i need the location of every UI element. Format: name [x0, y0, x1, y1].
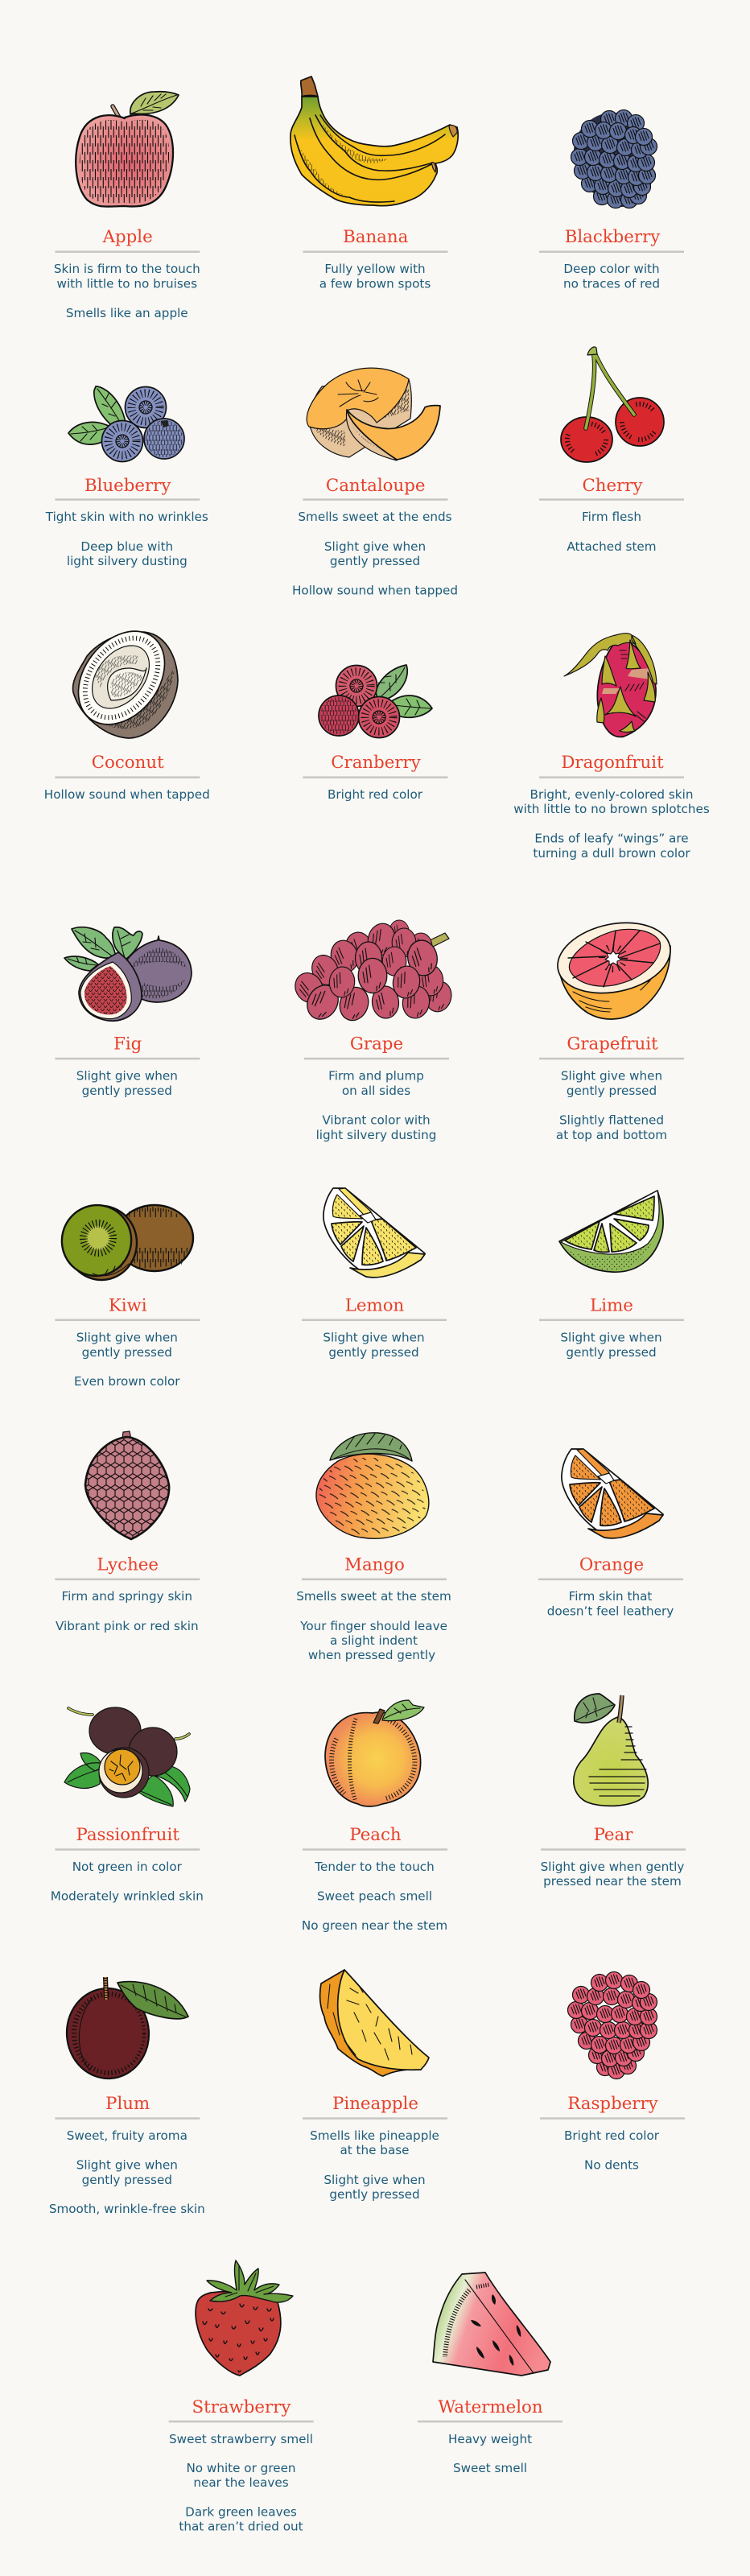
icon: cranberry: [319, 665, 432, 737]
text: dragonfruit tips: [513, 787, 710, 861]
panel: fig: [55, 927, 200, 1098]
icon: passionfruit: [64, 1707, 190, 1806]
heading: fig: Fig: [113, 1034, 142, 1055]
icon: pear: [574, 1694, 648, 1806]
text: pineapple tips: Slight give when: [323, 2173, 426, 2187]
text: lime tips: Slight give when: [560, 1331, 662, 1345]
panel: cherry: [539, 347, 684, 554]
panel: grapefruit: [539, 913, 684, 1142]
icon: coconut: [60, 614, 183, 741]
text: raspberry tips: No dents: [584, 2158, 639, 2173]
icon: kiwi: [53, 1196, 193, 1285]
text: watermelon tips: [448, 2432, 532, 2475]
heading: grape: Grape: [350, 1034, 403, 1055]
icon: raspberry: [568, 1972, 657, 2079]
panel: lemon: [302, 1188, 447, 1360]
text: apple tips: [54, 262, 200, 320]
heading: coconut: Coconut: [92, 753, 164, 773]
text: kiwi tips: [74, 1331, 180, 1389]
text: banana tips: Fully yellow with: [324, 262, 426, 276]
heading: banana: Banana: [343, 227, 409, 247]
panel: orange: [538, 1449, 683, 1618]
heading: cantaloupe: Cantaloupe: [326, 476, 425, 496]
panel: dragonfruit: [513, 634, 710, 861]
heading: blackberry: Blackberry: [565, 227, 660, 247]
text: banana tips: a few brown spots: [319, 277, 431, 291]
text: peach tips: Sweet peach smell: [317, 1889, 432, 1903]
text: cantaloupe tips: Slight give when: [324, 539, 426, 554]
panel: passionfruit: [51, 1707, 204, 1903]
icon: dragonfruit: [564, 634, 657, 737]
text: grape tips: Firm and plump: [328, 1069, 424, 1084]
icon: watermelon: [433, 2273, 550, 2376]
text: peach tips: Tender to the touch: [314, 1860, 435, 1874]
text: plum tips: Slight give when: [76, 2158, 178, 2173]
text: lychee tips: Vibrant pink or red skin: [56, 1619, 199, 1633]
text: lemon tips: [323, 1331, 425, 1360]
panel: peach: [302, 1700, 447, 1933]
text: plum tips: [49, 2128, 205, 2216]
text: dragonfruit tips: with little to no brown splotches: [513, 802, 710, 816]
text: grape tips: light silvery dusting: [316, 1128, 436, 1142]
panel: pineapple: [303, 1970, 447, 2202]
text: orange tips: doesn’t feel leathery: [547, 1604, 674, 1618]
text: pear tips: Slight give when gently: [541, 1860, 684, 1874]
panel: blackberry: [539, 109, 684, 291]
heading: orange: Orange: [579, 1555, 644, 1575]
text: cherry tips: Firm flesh: [582, 510, 641, 524]
text: plum tips: Smooth, wrinkle-free skin: [49, 2202, 205, 2216]
heading: pear: Pear: [594, 1825, 633, 1845]
text: grapefruit tips: Slightly flattened: [559, 1113, 664, 1127]
panel: raspberry: [540, 1972, 685, 2173]
text: grapefruit tips: gently pressed: [567, 1084, 657, 1098]
icon: plum: [64, 1977, 188, 2081]
text: apple tips: Skin is firm to the touch: [54, 262, 200, 276]
text: fig tips: [76, 1069, 178, 1098]
text: kiwi tips: Even brown color: [74, 1374, 180, 1389]
panel: banana: [291, 76, 458, 291]
panel: lychee: [55, 1431, 200, 1633]
text: lychee tips: Firm and springy skin: [62, 1589, 192, 1604]
heading: pineapple: Pineapple: [332, 2094, 418, 2114]
icon: cherry: [561, 347, 664, 462]
text: cherry tips: [567, 510, 657, 554]
text: dragonfruit tips: turning a dull brown color: [533, 846, 690, 861]
panel: watermelon: [418, 2273, 562, 2475]
text: strawberry tips: [169, 2432, 313, 2534]
text: watermelon tips: Sweet smell: [453, 2461, 527, 2475]
heading: raspberry: Raspberry: [567, 2094, 658, 2114]
panel: cranberry: [303, 665, 447, 802]
text: dragonfruit tips: Ends of leafy “wings” are: [534, 831, 689, 845]
heading: lime: Lime: [590, 1296, 633, 1315]
text: orange tips: [547, 1589, 674, 1618]
panel: kiwi: [53, 1196, 200, 1389]
text: grape tips: Vibrant color with: [322, 1113, 431, 1127]
text: mango tips: Smells sweet at the stem: [296, 1589, 451, 1604]
icon: peach: [325, 1700, 424, 1806]
icon: fig: [64, 927, 192, 1021]
text: strawberry tips: near the leaves: [193, 2475, 289, 2490]
text: passionfruit tips: Not green in color: [72, 1860, 183, 1874]
text: cranberry tips: Bright red color: [328, 787, 423, 802]
heading: grapefruit: Grapefruit: [567, 1034, 658, 1055]
text: coconut tips: Hollow sound when tapped: [44, 787, 210, 802]
text: peach tips: No green near the stem: [302, 1918, 447, 1933]
heading: plum: Plum: [105, 2094, 150, 2114]
icon: blueberry: [68, 386, 184, 462]
text: passionfruit tips: Moderately wrinkled skin: [51, 1889, 204, 1903]
heading: mango: Mango: [344, 1555, 405, 1575]
text: blackberry tips: no traces of red: [563, 277, 660, 291]
text: cantaloupe tips: Hollow sound when tapped: [292, 583, 458, 597]
heading: apple: Apple: [102, 227, 153, 247]
text: pineapple tips: Smells like pineapple: [310, 2128, 439, 2143]
panel: grape: [290, 920, 455, 1142]
text: raspberry tips: [564, 2128, 660, 2173]
panel: lime: [539, 1191, 684, 1360]
text: orange tips: Firm skin that: [569, 1589, 652, 1604]
panel: plum: [49, 1977, 205, 2216]
text: lemon tips: Slight give when: [323, 1331, 425, 1345]
panel: blueberry: [45, 386, 208, 568]
icon: lime: [559, 1191, 663, 1272]
text: plum tips: gently pressed: [82, 2173, 172, 2187]
icon: grapefruit: [551, 913, 677, 1019]
text: pineapple tips: [310, 2128, 439, 2202]
icon: orange: [562, 1449, 663, 1538]
text: blueberry tips: light silvery dusting: [67, 554, 188, 568]
icon: strawberry: [196, 2260, 293, 2376]
heading: strawberry: Strawberry: [192, 2397, 291, 2417]
text: lime tips: [560, 1331, 662, 1360]
text: cherry tips: Attached stem: [567, 539, 657, 554]
panel: strawberry: [169, 2260, 314, 2534]
text: mango tips: when pressed gently: [308, 1648, 435, 1662]
heading: blueberry: Blueberry: [84, 476, 171, 496]
icon: cantaloupe: [307, 368, 440, 460]
icon: grape: [290, 920, 455, 1025]
text: raspberry tips: Bright red color: [564, 2128, 660, 2143]
icon: blackberry: [571, 109, 657, 208]
text: pineapple tips: at the base: [340, 2143, 410, 2157]
heading: peach: Peach: [349, 1825, 402, 1845]
text: blackberry tips: [563, 262, 660, 291]
text: grapefruit tips: [556, 1069, 667, 1142]
text: blueberry tips: Deep blue with: [80, 539, 173, 554]
panel: coconut: [44, 614, 210, 802]
text: lemon tips: gently pressed: [328, 1345, 419, 1360]
text: apple tips: with little to no bruises: [57, 277, 197, 291]
heading: cranberry: Cranberry: [331, 753, 421, 773]
text: peach tips: [302, 1860, 447, 1933]
text: grapefruit tips: Slight give when: [561, 1069, 662, 1084]
text: blueberry tips: [45, 510, 208, 568]
heading: lychee: Lychee: [97, 1555, 159, 1575]
text: strawberry tips: Dark green leaves: [185, 2505, 297, 2520]
text: strawberry tips: Sweet strawberry smell: [169, 2432, 313, 2446]
text: kiwi tips: gently pressed: [82, 1345, 172, 1360]
text: grape tips: on all sides: [342, 1084, 410, 1098]
text: pineapple tips: gently pressed: [329, 2187, 420, 2202]
panel: pear: [541, 1694, 686, 1889]
text: lime tips: gently pressed: [566, 1345, 657, 1360]
panel: apple: [54, 92, 200, 320]
text: mango tips: [296, 1589, 451, 1662]
icon: lemon: [323, 1188, 425, 1278]
text: lychee tips: [56, 1589, 199, 1633]
text: strawberry tips: No white or green: [186, 2461, 296, 2475]
text: mango tips: Your finger should leave: [299, 1619, 447, 1633]
icon: lychee: [85, 1431, 169, 1539]
text: strawberry tips: that aren’t dried out: [179, 2520, 303, 2534]
icon: mango: [316, 1433, 429, 1538]
heading: passionfruit: Passionfruit: [76, 1825, 179, 1845]
icon: pineapple: [320, 1970, 429, 2076]
heading: lemon: Lemon: [345, 1296, 405, 1315]
text: grapefruit tips: at top and bottom: [556, 1128, 667, 1142]
text: cantaloupe tips: gently pressed: [330, 554, 420, 568]
text: passionfruit tips: [51, 1860, 204, 1903]
text: pear tips: [541, 1860, 684, 1889]
text: cantaloupe tips: [292, 510, 458, 597]
text: watermelon tips: Heavy weight: [448, 2432, 532, 2446]
text: mango tips: a slight indent: [330, 1633, 418, 1648]
panel: mango: [296, 1433, 451, 1662]
text: blackberry tips: Deep color with: [563, 262, 660, 276]
icon: apple: [76, 92, 179, 207]
text: cantaloupe tips: Smells sweet at the ends: [298, 510, 452, 524]
icon: banana: [291, 76, 458, 206]
text: blueberry tips: Tight skin with no wrinkles: [45, 510, 208, 524]
text: fig tips: Slight give when: [76, 1069, 178, 1084]
text: pear tips: pressed near the stem: [543, 1874, 682, 1889]
text: plum tips: Sweet, fruity aroma: [67, 2128, 188, 2143]
panel: cantaloupe: [292, 368, 458, 597]
text: dragonfruit tips: Bright, evenly-colored skin: [530, 787, 693, 802]
heading: dragonfruit: Dragonfruit: [561, 753, 664, 773]
heading: watermelon: Watermelon: [438, 2397, 543, 2417]
text: fig tips: gently pressed: [82, 1084, 172, 1098]
text: apple tips: Smells like an apple: [66, 306, 188, 320]
heading: kiwi: Kiwi: [109, 1296, 147, 1315]
heading: cherry: Cherry: [582, 476, 643, 496]
text: banana tips: [319, 262, 431, 291]
text: kiwi tips: Slight give when: [76, 1331, 178, 1345]
text: grape tips: [316, 1069, 436, 1142]
